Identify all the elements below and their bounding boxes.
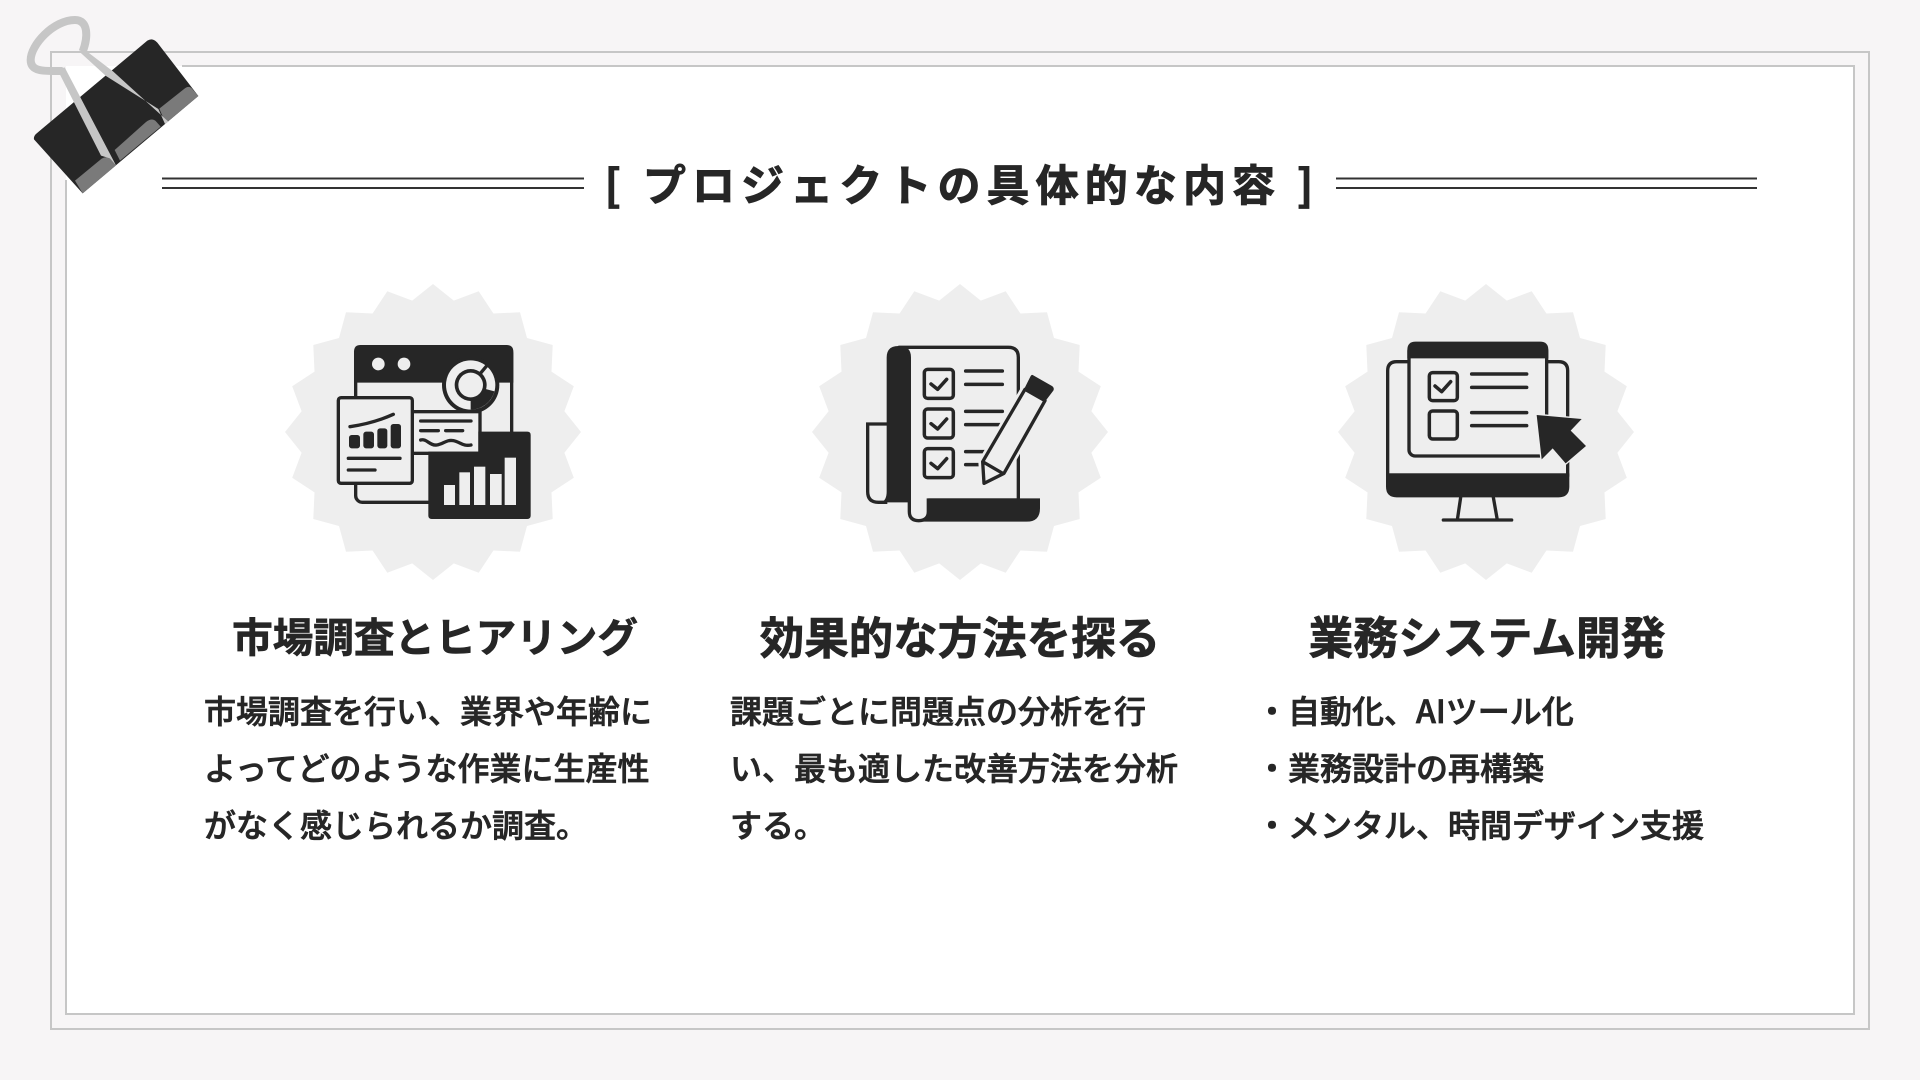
- body text: する。: [730, 801, 826, 847]
- body text: い、最も適した改善方法を分析: [730, 744, 1178, 790]
- body text: ・自動化、AIツール化: [1256, 687, 1574, 733]
- body text: [204, 687, 652, 847]
- panel: effective methods: [730, 284, 1178, 847]
- heading: 効果的な方法を探る: [760, 602, 1160, 666]
- title: [ プロジェクトの具体的な内容 ]: [605, 152, 1319, 214]
- body text: ・メンタル、時間デザイン支援: [1256, 801, 1704, 847]
- panel: business system development: [1256, 284, 1704, 847]
- body text: よってどのような作業に生産性: [204, 744, 649, 790]
- body text: ・業務設計の再構築: [1256, 744, 1544, 790]
- body text: 課題ごとに問題点の分析を行: [730, 687, 1146, 733]
- panel: market research: [204, 284, 652, 847]
- body text: [730, 687, 1178, 847]
- heading: 業務システム開発: [1308, 602, 1666, 666]
- body text: [1256, 687, 1704, 847]
- body text: 市場調査を行い、業界や年齢に: [204, 687, 652, 733]
- heading: 市場調査とヒアリング: [232, 604, 638, 664]
- body text: がなく感じられるか調査。: [204, 801, 588, 847]
